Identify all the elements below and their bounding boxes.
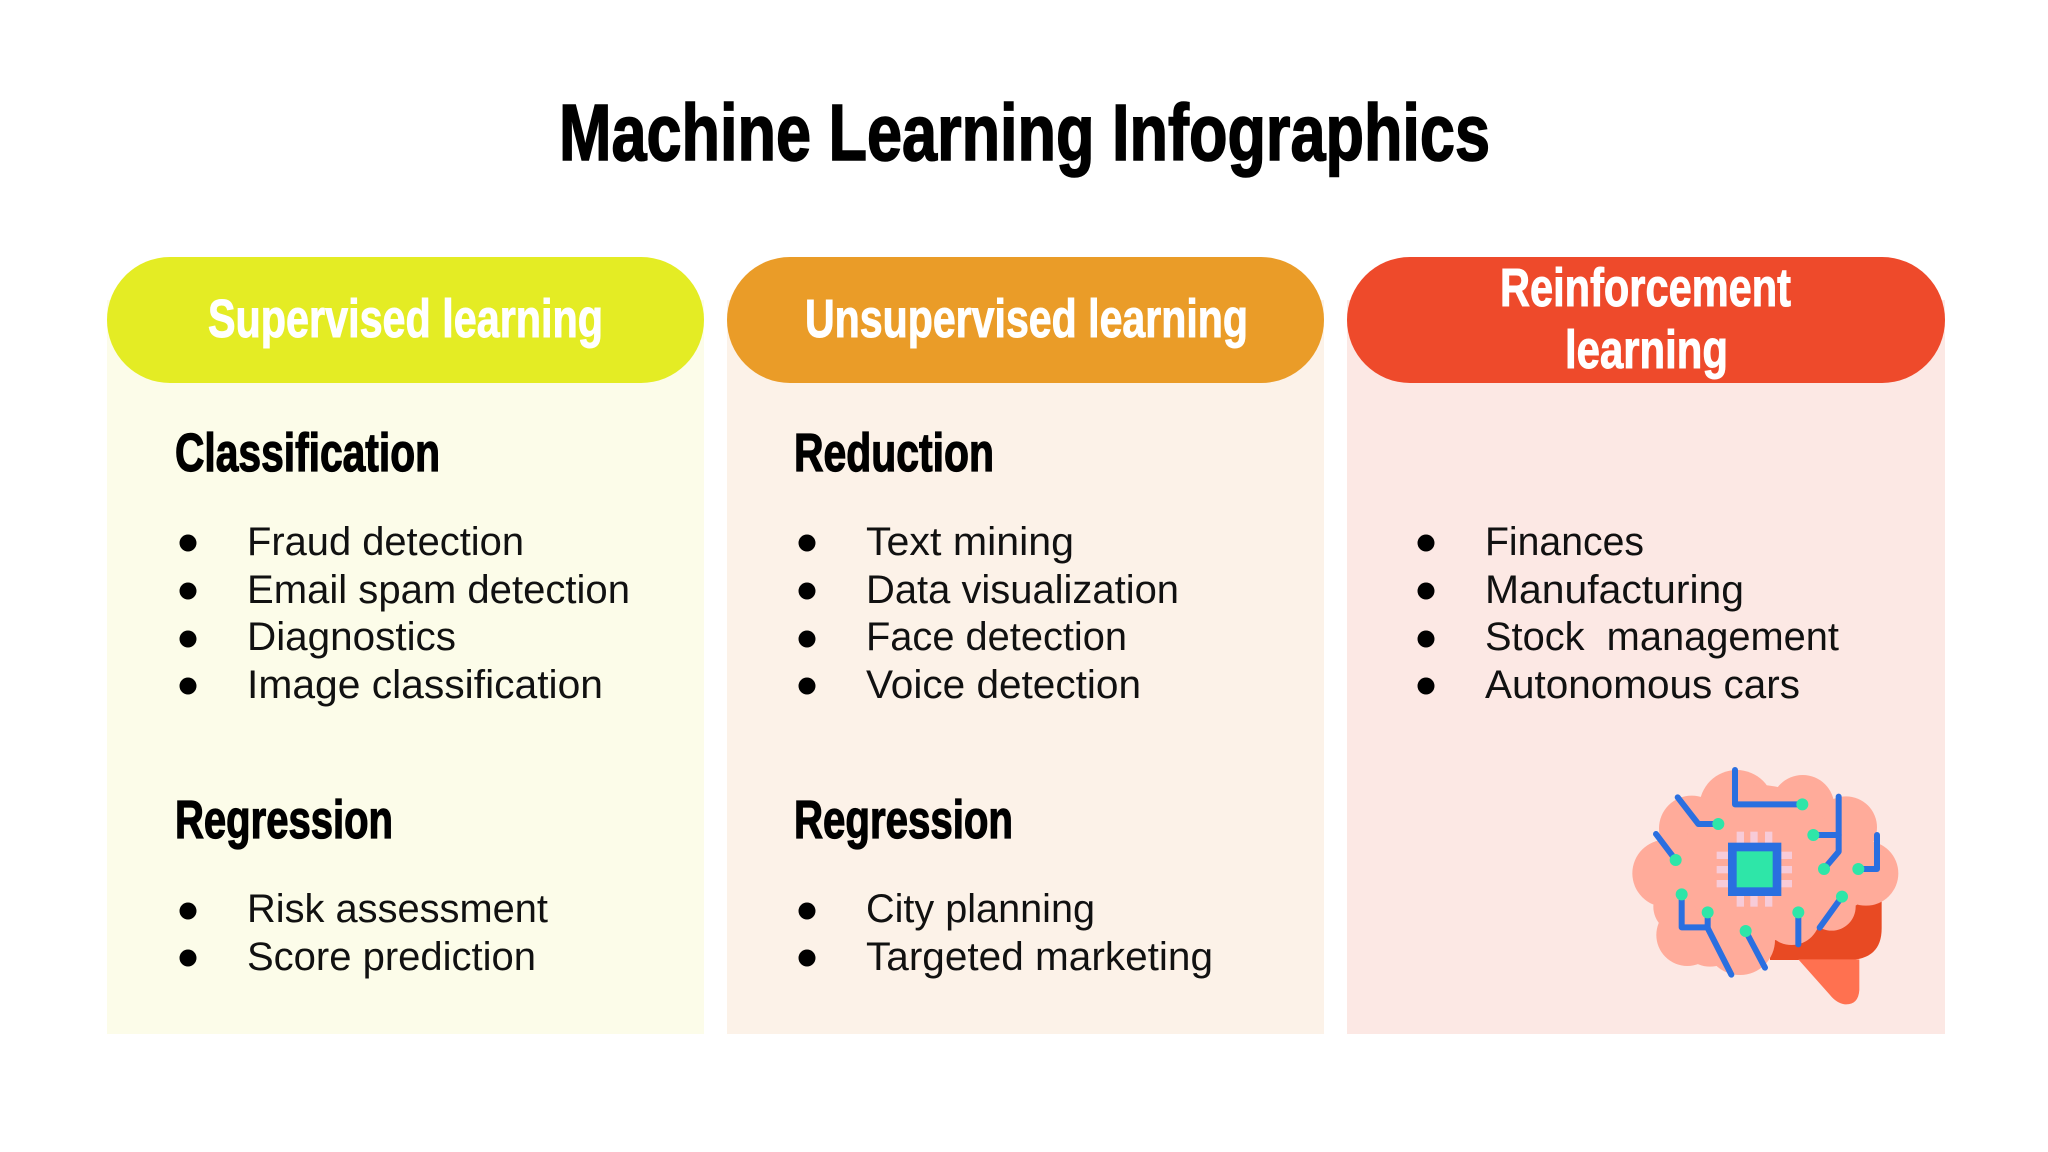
list: reduction uses: Text mining xyxy=(866,520,1074,564)
list: reinforcement uses xyxy=(1418,520,1839,707)
circuit traces xyxy=(1656,770,1877,975)
panel: supervised learning xyxy=(107,257,704,1034)
panel: unsupervised learning xyxy=(727,257,1324,1034)
icon: brain with circuit chip xyxy=(1632,770,1898,1004)
header pill: Unsupervised learning xyxy=(805,289,1248,349)
header pill: Supervised learning xyxy=(208,289,603,349)
heading: reduction: Reduction xyxy=(794,423,994,483)
chip pins xyxy=(1717,832,1792,907)
list: regression uses xyxy=(798,887,1213,979)
header pill xyxy=(727,257,1324,383)
list: reinforcement uses: Finances xyxy=(1485,520,1644,564)
list: reduction uses: Voice detection xyxy=(866,663,1141,707)
panel: reinforcement learning xyxy=(1347,257,1945,1034)
brain stem xyxy=(1770,897,1882,960)
list: regression uses: City planning xyxy=(866,887,1095,931)
heading: regression: Regression xyxy=(794,790,1013,850)
panel background xyxy=(727,300,1324,1034)
list: reinforcement uses: Autonomous cars xyxy=(1485,663,1800,707)
list: regression uses xyxy=(180,887,548,979)
list: reduction uses xyxy=(798,520,1179,707)
list: reduction uses: Face detection xyxy=(866,615,1127,659)
title: Machine Learning Infographics xyxy=(559,88,1490,177)
heading: regression: Regression xyxy=(175,790,393,850)
panel background xyxy=(107,300,704,1034)
list: regression uses: Targeted marketing xyxy=(866,935,1213,979)
list: classification uses xyxy=(180,520,630,707)
list: reinforcement uses: Manufacturing xyxy=(1485,568,1744,612)
list: classification uses: Image classification xyxy=(247,663,603,707)
list: regression uses: Score prediction xyxy=(247,935,536,979)
header pill xyxy=(1347,257,1945,383)
panel background xyxy=(1347,300,1945,1034)
header pill: learning xyxy=(1565,320,1728,380)
header pill xyxy=(107,257,704,383)
chip xyxy=(1728,843,1781,896)
list: classification uses: Fraud detection xyxy=(247,520,524,564)
heading: classification: Classification xyxy=(175,423,440,483)
list: classification uses: Diagnostics xyxy=(247,615,456,659)
list: classification uses: Email spam detection xyxy=(247,568,630,612)
circuit nodes xyxy=(1670,798,1864,937)
header pill: Reinforcement xyxy=(1500,258,1791,318)
list: reinforcement uses: Stock management xyxy=(1485,615,1839,659)
list: reduction uses: Data visualization xyxy=(866,568,1179,612)
list: regression uses: Risk assessment xyxy=(247,887,548,931)
brain lobes xyxy=(1632,770,1898,975)
